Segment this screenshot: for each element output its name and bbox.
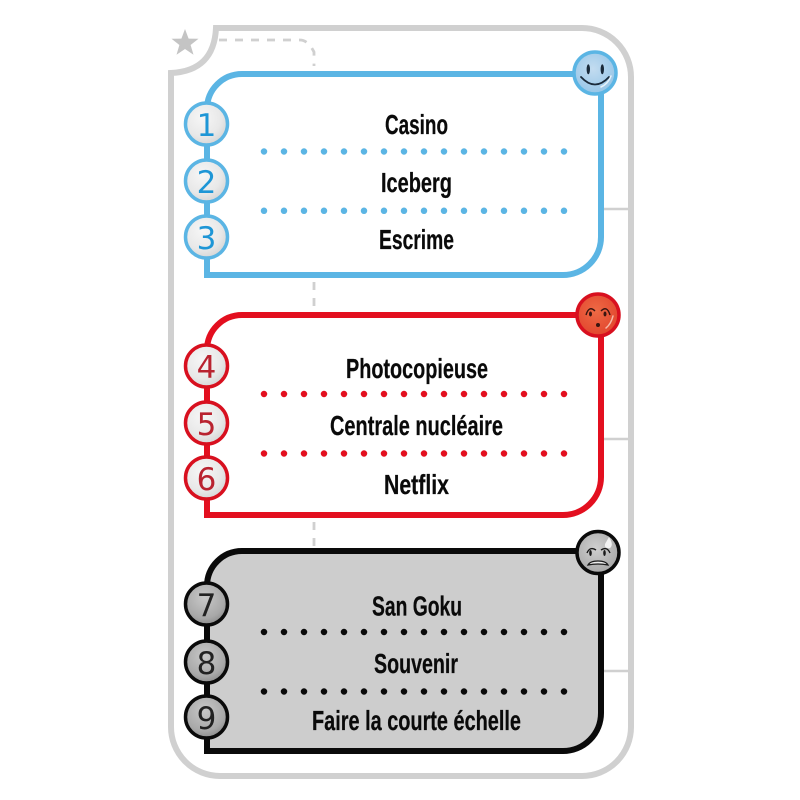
label: Escrime: Escrime <box>379 224 454 255</box>
panel: black <box>186 532 619 751</box>
label: Photocopieuse: Photocopieuse <box>346 353 488 384</box>
icon: worried face <box>577 294 619 336</box>
badge 3: 3 <box>197 221 216 257</box>
badge 9 <box>186 696 228 738</box>
badge 4: 4 <box>197 350 216 386</box>
badge 7: 7 <box>197 588 216 624</box>
badge 3 <box>186 216 228 258</box>
badge 8: 8 <box>197 646 216 682</box>
label: Centrale nucléaire: Centrale nucléaire <box>330 410 503 441</box>
badge 8 <box>186 641 228 683</box>
badge 6: 6 <box>197 462 216 498</box>
badge 2: 2 <box>197 165 216 201</box>
badge 7 <box>186 583 228 625</box>
panel: red <box>186 294 619 515</box>
badge 6 <box>186 457 228 499</box>
label: Casino: Casino <box>385 109 448 140</box>
label: Faire la courte échelle: Faire la courte échelle <box>312 705 521 736</box>
blue frame <box>207 74 601 275</box>
card outline <box>171 28 631 776</box>
badge 5: 5 <box>197 407 216 443</box>
badge 1 <box>186 103 228 145</box>
label: Souvenir: Souvenir <box>374 648 458 679</box>
icon: star <box>172 29 198 55</box>
badge 5 <box>186 402 228 444</box>
badge 4 <box>186 345 228 387</box>
icon: sweating sad face <box>577 532 619 574</box>
right side ticks <box>603 209 631 671</box>
icon: happy face <box>574 52 616 94</box>
blue dotted dividers <box>264 152 565 211</box>
label: Iceberg: Iceberg <box>381 167 452 198</box>
badge 2 <box>186 160 228 202</box>
badge 9: 9 <box>197 701 216 737</box>
dashed connector line <box>219 40 314 550</box>
label: San Goku: San Goku <box>372 590 462 622</box>
label: Netflix: Netflix <box>384 469 450 500</box>
red dotted dividers <box>264 394 565 454</box>
black frame <box>207 551 601 751</box>
red frame <box>207 315 601 515</box>
black dotted dividers <box>264 632 565 692</box>
badge 1: 1 <box>197 108 216 144</box>
panel: blue <box>186 52 616 275</box>
